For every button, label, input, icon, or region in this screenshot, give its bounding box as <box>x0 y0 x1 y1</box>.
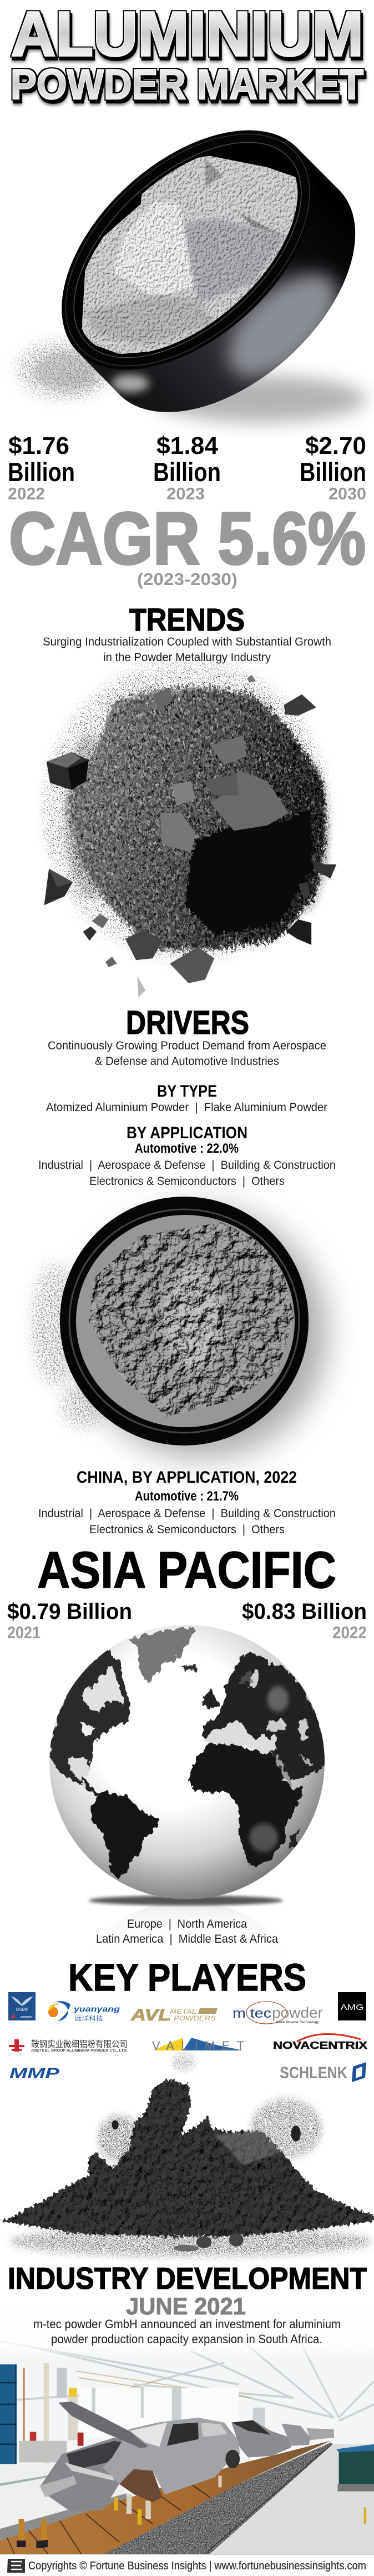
illustration: round dish of powder <box>32 1197 327 1458</box>
stat: 2022: $0.83 Billion <box>242 1599 367 1624</box>
segment: by application: Automotive : 22.0% <box>135 1141 239 1156</box>
date: JUNE 2021 <box>126 2293 246 2320</box>
stat: 2030 <box>300 432 366 503</box>
segment: by type: Atomized Aluminium Powder | Flake Aluminium Powder <box>46 1101 327 1114</box>
stat: 2021: 2021 <box>7 1623 41 1642</box>
logo: AVL metal powders: POWDERS <box>174 2014 216 2022</box>
logo: MMP: MMP <box>9 2065 60 2082</box>
logo: yuanyang <box>48 2001 120 2022</box>
logo: Ansteel: 鞍钢实业微细铝粉有限公司 <box>31 2039 128 2049</box>
stat: 2030: $2.70 <box>305 432 366 459</box>
illustration: factory assembly line <box>0 2302 374 2554</box>
panel: regional <box>7 1541 367 1967</box>
segment: china by application <box>38 1468 336 1536</box>
logo: Schlenk: SCHLENK <box>280 2064 347 2082</box>
stat: 2022: 2022 <box>332 1623 367 1642</box>
segment: by type <box>46 1082 327 1114</box>
stat: 2030: 2030 <box>328 484 366 503</box>
stat: 2022: $1.76 <box>8 432 69 459</box>
logo: AVL metal powders: METAL <box>170 2008 196 2015</box>
logo: Ansteel <box>9 2039 128 2053</box>
segment: by type: BY TYPE <box>157 1082 217 1101</box>
trends text <box>43 636 331 664</box>
logo: m-tec powder <box>233 2002 323 2024</box>
illustration: crushed rock pile <box>43 661 336 997</box>
panel: market size figures <box>8 432 366 589</box>
title <box>11 0 363 108</box>
CAGR period: (2023-2030) <box>137 569 237 589</box>
stat: 2023: Billion <box>153 457 221 487</box>
logo: m-tec powder: powder <box>272 2004 323 2021</box>
logo: yuanyang: 远洋科技 <box>74 2014 103 2022</box>
drivers text: Continuously Growing Product Demand from Aerospace <box>48 1039 326 1052</box>
segment: by application: BY APPLICATION <box>127 1124 247 1142</box>
heading: drivers: DRIVERS <box>126 1004 249 1041</box>
stat: 2023: 2023 <box>166 484 205 503</box>
logo: AMG <box>338 1992 366 2020</box>
segment: china by application: Automotive : 21.7% <box>135 1489 239 1504</box>
segment: china by application: Industrial | Aerospace & Defense | Building & Construction <box>38 1507 336 1520</box>
logo: m-tec powder: Metal Powder Technology <box>276 2021 320 2024</box>
segment: china by application: CHINA, BY APPLICATION, 2022 <box>77 1468 297 1487</box>
stat: 2022: Billion <box>8 457 75 487</box>
other regions list: Latin America | Middle East & Africa <box>96 1933 278 1945</box>
illustration: black powder mound <box>0 2054 374 2257</box>
heading: key players: KEY PLAYERS <box>68 1956 306 1999</box>
continents <box>49 1626 325 1880</box>
development text: m-tec powder GmbH announced an investment for aluminium <box>33 2317 341 2331</box>
icon: brand mark <box>7 2559 25 2573</box>
stat: 2022: 2022 <box>8 484 45 503</box>
other regions list: Europe | North America <box>127 1918 247 1930</box>
illustration: tilted black bowl of powder <box>17 84 366 422</box>
segment: by application: Industrial | Aerospace & Defense | Building & Construction <box>38 1159 336 1172</box>
drivers text: & Defense and Automotive Industries <box>95 1055 279 1068</box>
segment: china by application: Electronics & Semiconductors | Others <box>89 1523 285 1536</box>
trends text: in the Powder Metallurgy Industry <box>103 651 271 664</box>
logo: yuanyang: yuanyang <box>73 2004 120 2013</box>
stat: 2022 <box>242 1599 367 1642</box>
panel: drivers and segments <box>32 1004 336 1536</box>
stat: 2023: $1.84 <box>156 432 219 459</box>
logo: AVL metal powders: AVL <box>130 2006 171 2024</box>
segment: by application: Electronics & Semiconductors | Others <box>89 1175 285 1188</box>
logo: USMP: USMP <box>16 2007 29 2012</box>
development text <box>33 2317 341 2346</box>
drivers text <box>48 1039 326 1068</box>
footer <box>0 2554 374 2576</box>
logo: m-tec powder: m tec <box>233 2006 271 2021</box>
development text: powder production capacity expansion in South Africa. <box>51 2332 322 2346</box>
rock fragments <box>44 675 336 997</box>
panel: header <box>11 0 366 422</box>
stat: 2022 <box>8 432 75 503</box>
illustration: globe <box>49 1625 325 1899</box>
stat: 2021: $0.79 Billion <box>7 1599 132 1624</box>
segment: by application <box>38 1124 336 1188</box>
title: ALUMINIUM <box>11 0 363 69</box>
heading: trends: TRENDS <box>129 602 245 638</box>
heading: asia pacific: ASIA PACIFIC <box>37 1541 336 1599</box>
logo: Novacentrix: NOVACENTRIX <box>273 2040 367 2051</box>
stat: 2021 <box>7 1599 132 1642</box>
panel: industry development <box>0 2054 374 2554</box>
trends text: Surging Industrialization Coupled with Substantial Growth <box>43 636 331 648</box>
logo: Ansteel: ANSTEEL GROUP ALUMINIUM POWDER CO., LTD. <box>31 2049 128 2053</box>
other regions list <box>96 1918 278 1945</box>
logo: Novacentrix <box>273 2034 367 2051</box>
logo: AMG: AMG <box>341 2003 364 2012</box>
globe reflection <box>78 1895 300 1967</box>
logo: Valimet: VALIMET <box>152 2039 244 2053</box>
panel: trends <box>43 602 336 997</box>
logo: AVL metal powders <box>130 2006 218 2024</box>
logo: USMP <box>8 1992 36 2020</box>
panel: key players <box>8 1956 367 2082</box>
stat: 2023 <box>153 432 221 503</box>
